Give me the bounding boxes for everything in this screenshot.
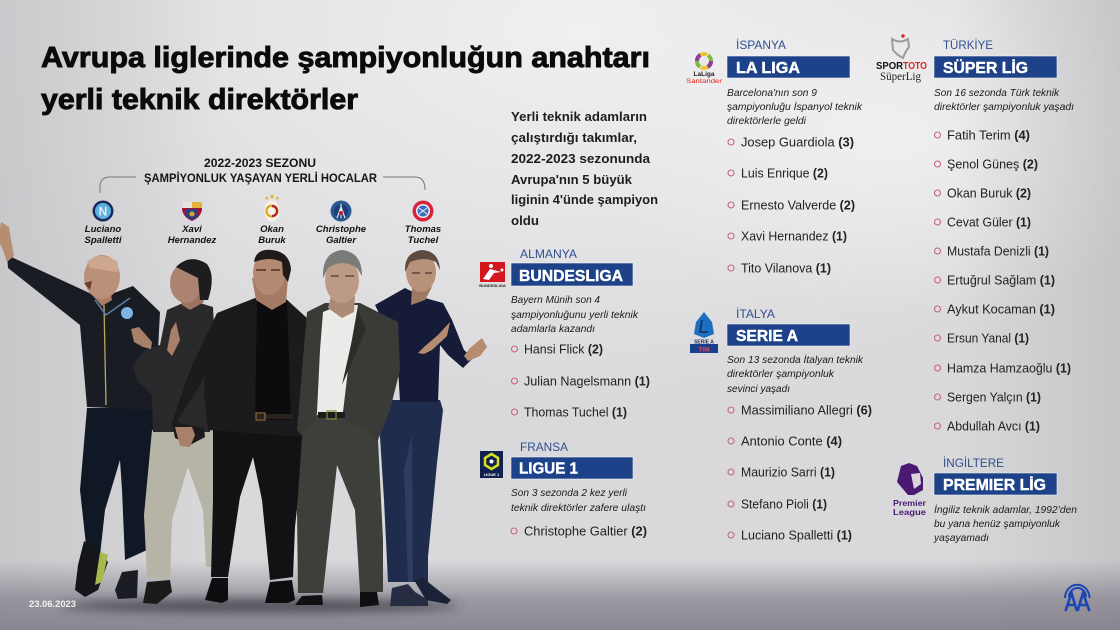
icon: LaLiga logo: LaLiga — [694, 71, 715, 78]
coach logos and names — [85, 194, 441, 246]
heading connector bracket — [100, 177, 425, 193]
league bar — [934, 56, 1057, 78]
name: Christophe Galtier: Galtier — [326, 235, 357, 246]
coach list: Julian Nagelsmann (1) — [524, 374, 650, 388]
icon: Galatasaray badge — [264, 194, 280, 222]
coach list: Maurizio Sarri (1) — [741, 466, 835, 480]
icon: Spor Toto Süper Lig logo — [876, 34, 927, 83]
name: Okan Buruk — [258, 224, 286, 246]
description: şampiyonluğu İspanyol teknik — [727, 101, 863, 113]
icon: Premier League logo — [893, 463, 927, 517]
league bar: LA LIGA — [736, 60, 800, 77]
coach list: Luis Enrique (2) — [741, 166, 828, 180]
description: şampiyonluğunu yerli teknik — [511, 309, 639, 321]
name: Luciano Spalletti: Spalletti — [85, 235, 122, 246]
figure: Okan Buruk — [172, 250, 320, 603]
description — [933, 504, 1077, 544]
icon: Barcelona badge — [182, 202, 202, 221]
name: Xavi Hernandez: Xavi — [181, 224, 202, 235]
panel: İtalya Serie A — [690, 308, 872, 542]
icon: Spor Toto Süper Lig logo: SPOR — [876, 61, 904, 72]
intro text: liginin 4'ünde şampiyon — [511, 192, 658, 207]
name: Okan Buruk: Buruk — [258, 235, 286, 246]
intro text: Avrupa'nın 5 büyük — [511, 172, 633, 187]
intro text: 2022-2023 sezonunda — [511, 151, 651, 166]
coaches group illustration — [0, 222, 487, 607]
figure: Luciano Spalletti — [0, 222, 160, 599]
description: Son 16 sezonda Türk teknik — [934, 87, 1060, 99]
coach list: Ersun Yanal (1) — [947, 332, 1029, 346]
icon: Bundesliga logo — [479, 262, 506, 288]
coach list: Mustafa Denizli (1) — [947, 244, 1049, 258]
season heading: 2022-2023 SEZONU — [204, 158, 316, 170]
coach list: Abdullah Avcı (1) — [947, 420, 1040, 434]
season heading — [144, 158, 378, 185]
icon: Premier League logo: Premier — [893, 498, 927, 508]
season heading: ŞAMPİYONLUK YAŞAYAN YERLİ HOCALAR — [144, 172, 378, 185]
description: teknik direktörler zafere ulaştı — [511, 502, 646, 514]
coach list: Thomas Tuchel (1) — [524, 406, 627, 420]
icon: Napoli badge — [92, 200, 114, 222]
description: İngiliz teknik adamlar, 1992’den — [934, 504, 1077, 516]
league bar — [727, 56, 850, 78]
coach list: Hansi Flick (2) — [524, 342, 603, 356]
icon: PSG badge — [330, 200, 352, 222]
icon: Bundesliga logo: BUNDESLIGA — [479, 283, 506, 288]
description: sevinci yaşadı — [727, 383, 790, 395]
icon: Bayern badge — [412, 200, 434, 222]
coach list — [934, 128, 1071, 434]
coach list: Aykut Kocaman (1) — [947, 302, 1055, 316]
coach list: Xavi Hernandez (1) — [741, 230, 847, 244]
description: direktörler şampiyonluk yaşadı — [934, 101, 1074, 113]
date: 23.06.2023 — [29, 599, 76, 610]
name: Xavi Hernandez — [168, 224, 217, 246]
intro text: Yerli teknik adamların — [511, 109, 647, 124]
coach list: Okan Buruk (2) — [947, 186, 1031, 200]
panel: Almanya Bundesliga — [479, 249, 650, 420]
coach list: Luciano Spalletti (1) — [741, 528, 852, 542]
intro text: çalıştırdığı takımlar, — [511, 130, 637, 145]
figure: Thomas Tuchel — [375, 250, 487, 606]
intro text: oldu — [511, 213, 539, 228]
panel: İngiltere Premier Lig — [893, 457, 1077, 544]
icon: Premier League logo: League — [893, 507, 926, 517]
icon: Serie A logo — [690, 312, 718, 354]
league bar: SÜPER LİG — [943, 60, 1028, 77]
panel: İspanya La Liga — [686, 39, 863, 276]
icon: LaLiga logo — [686, 54, 723, 85]
coach list: Cevat Güler (1) — [947, 216, 1031, 230]
name: Thomas Tuchel: Thomas — [405, 224, 441, 235]
figure: Christophe Galtier — [295, 250, 400, 607]
description: direktörler şampiyonluk — [727, 368, 835, 380]
description — [934, 87, 1074, 113]
title: yerli teknik direktörler — [41, 84, 358, 116]
name: Christophe Galtier — [316, 224, 367, 246]
name: Okan Buruk: Okan — [260, 224, 284, 235]
coach list: Fatih Terim (4) — [947, 128, 1030, 142]
intro text — [511, 109, 658, 228]
panel: Türkiye Süper Lig — [876, 34, 1074, 434]
coach list: Tito Vilanova (1) — [741, 262, 831, 276]
country label: TÜRKİYE — [943, 39, 993, 52]
league bar — [511, 457, 633, 479]
description: yaşayamadı — [933, 532, 989, 544]
coach list: Şenol Güneş (2) — [947, 158, 1038, 172]
description: Barcelona'nın son 9 — [727, 87, 817, 99]
coach list: Josep Guardiola (3) — [741, 136, 854, 150]
league bar: SERIE A — [736, 328, 798, 345]
description: Son 13 sezonda İtalyan teknik — [727, 354, 864, 366]
icon: Napoli badge: N — [99, 204, 107, 218]
name: Xavi Hernandez: Hernandez — [168, 235, 217, 246]
description: Bayern Münih son 4 — [511, 294, 600, 306]
coach list — [512, 342, 650, 420]
title: Avrupa liglerinde şampiyonluğun anahtarı — [41, 42, 650, 74]
name: Luciano Spalletti — [85, 224, 122, 246]
icon: Ligue 1 logo: LIGUE 1 — [484, 472, 500, 477]
league bar: LIGUE 1 — [519, 460, 578, 478]
description: direktörlerle geldi — [727, 115, 807, 127]
figure: Xavi Hernandez — [131, 259, 215, 604]
coach list — [728, 136, 855, 276]
panel: Fransa Ligue 1 — [480, 442, 647, 538]
description: bu yana henüz şampiyonluk — [934, 518, 1061, 530]
description: adamlarla kazandı — [511, 323, 595, 335]
coach list: Sergen Yalçın (1) — [947, 390, 1041, 404]
league bar — [727, 324, 850, 346]
icon: Ligue 1 logo — [480, 451, 503, 478]
coach list — [728, 404, 872, 542]
name: Christophe Galtier: Christophe — [316, 224, 367, 235]
coach list: Ernesto Valverde (2) — [741, 198, 855, 212]
title — [41, 42, 650, 116]
description — [727, 87, 863, 127]
description — [511, 487, 646, 514]
icon: Spor Toto Süper Lig logo: SüperLig — [880, 69, 921, 83]
coach list: Ertuğrul Sağlam (1) — [947, 274, 1055, 288]
icon: Spor Toto Süper Lig logo: TOTO — [903, 61, 927, 72]
league bar — [934, 473, 1057, 495]
name: Thomas Tuchel — [405, 224, 441, 246]
coach list: Antonio Conte (4) — [741, 434, 842, 448]
league bar — [511, 263, 633, 286]
icon: LaLiga logo: Santander — [686, 78, 723, 85]
icon: Anadolu Agency logo — [1065, 585, 1090, 611]
name: Luciano Spalletti: Luciano — [85, 224, 121, 235]
coach list: Christophe Galtier (2) — [524, 524, 647, 538]
icon: Serie A logo: SERIE A — [694, 340, 714, 346]
league bar: BUNDESLIGA — [519, 268, 623, 285]
coach list: Massimiliano Allegri (6) — [741, 404, 872, 418]
country label: ALMANYA — [520, 249, 577, 261]
country label: İTALYA — [736, 308, 775, 321]
country label: FRANSA — [520, 442, 568, 454]
name: Thomas Tuchel: Tuchel — [408, 235, 439, 246]
league bar: PREMIER LİG — [943, 477, 1046, 494]
icon: Serie A logo: TIM — [698, 346, 710, 354]
description — [511, 294, 639, 335]
coach list: Stefano Pioli (1) — [741, 498, 827, 512]
coach list: Hamza Hamzaoğlu (1) — [947, 362, 1071, 376]
description — [727, 354, 864, 395]
country label: İNGİLTERE — [943, 457, 1004, 470]
country label: İSPANYA — [736, 39, 786, 52]
description: Son 3 sezonda 2 kez yerli — [511, 487, 628, 499]
